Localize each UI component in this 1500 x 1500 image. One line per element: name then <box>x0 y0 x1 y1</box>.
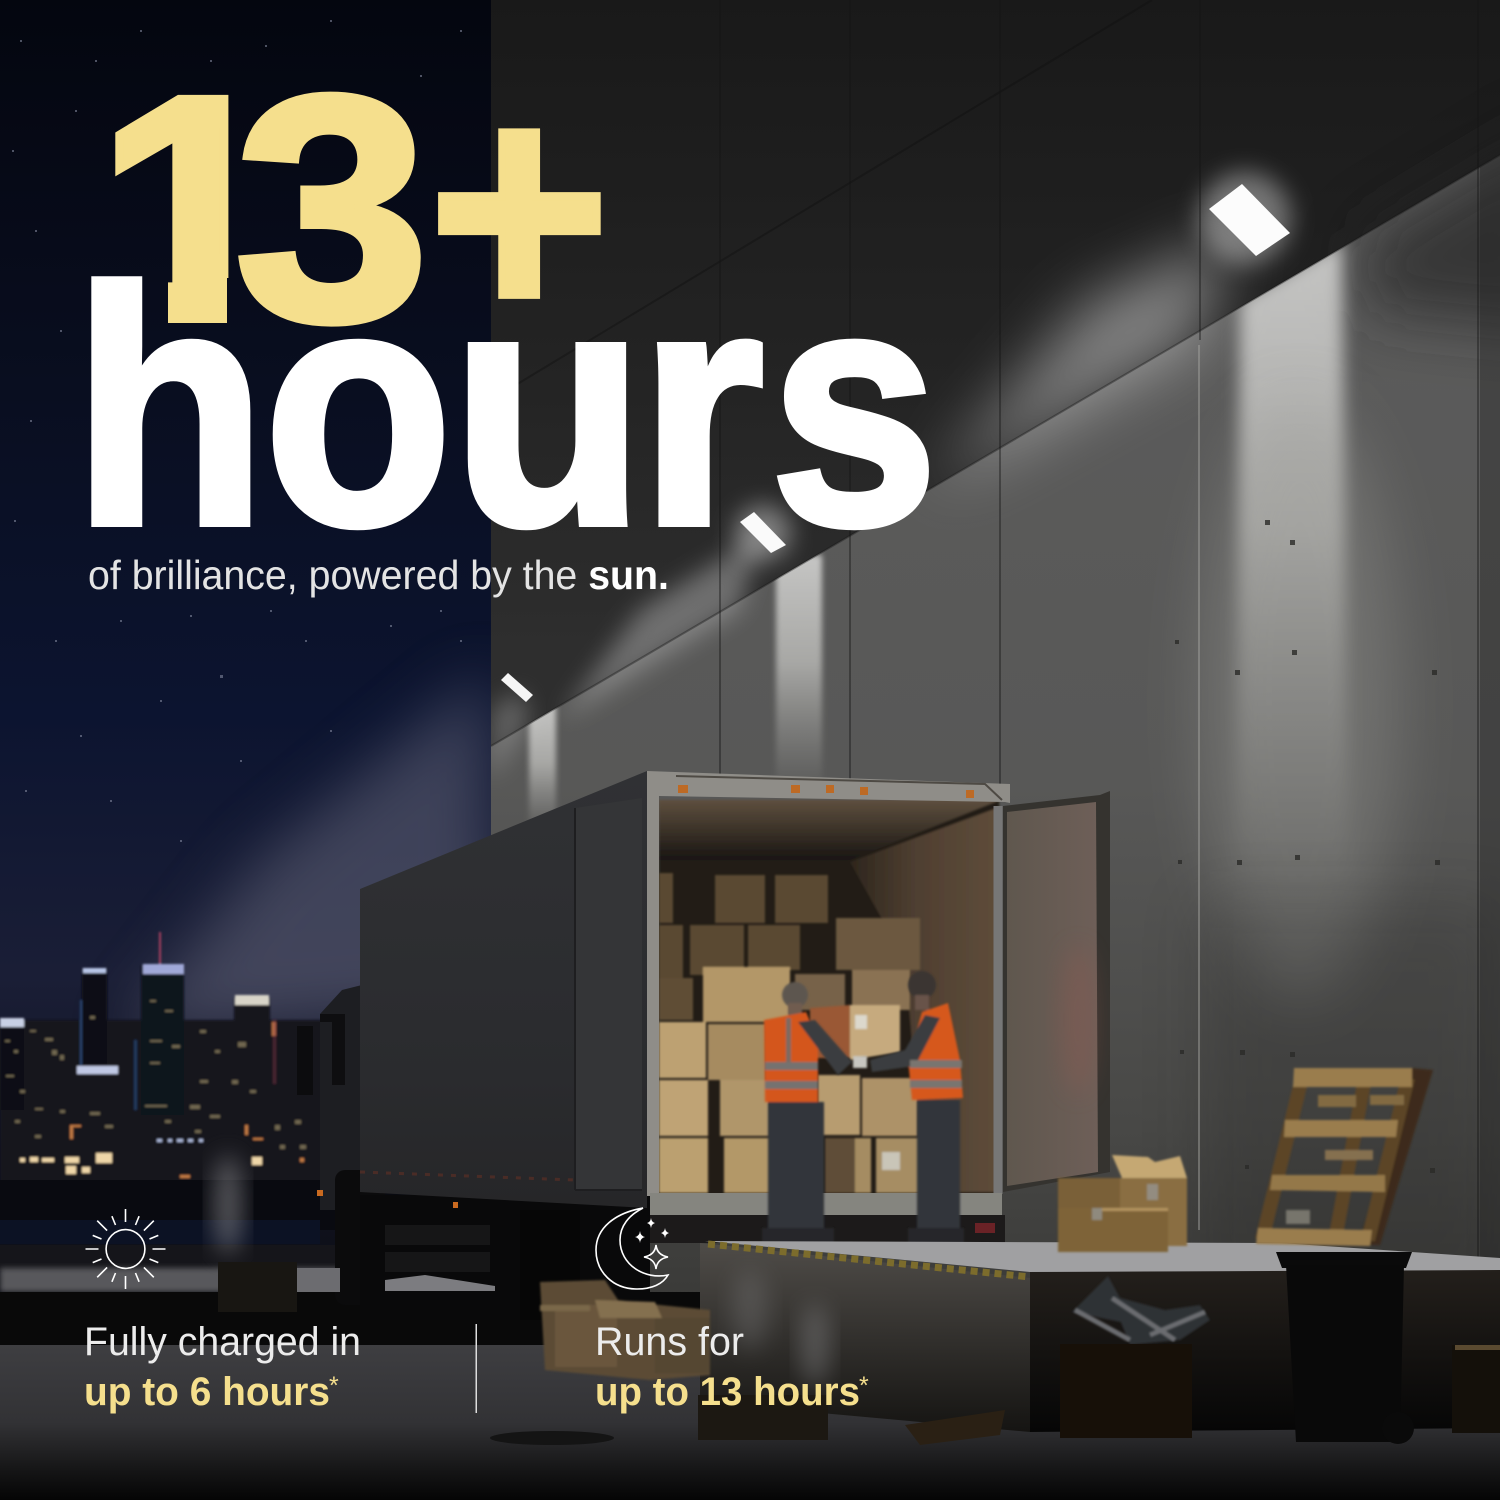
worker right <box>853 971 964 1244</box>
stat: run time: Runs for <box>595 1320 744 1364</box>
heading: 13+ <box>115 92 601 327</box>
lamp: middle wall light <box>740 512 786 553</box>
steam and small box left <box>214 1155 297 1312</box>
stat: charge time: Fully charged in <box>84 1320 361 1364</box>
foreground boxes and steam <box>490 1270 1005 1445</box>
stat: charge time: * <box>329 1372 339 1400</box>
worker left <box>762 982 852 1244</box>
heading: hours: r <box>640 221 764 595</box>
ground and water <box>0 1180 1500 1500</box>
icon: moon and stars <box>596 1208 669 1289</box>
truck interior <box>659 800 1000 1195</box>
open truck door <box>1003 791 1110 1192</box>
stat: run time: * <box>859 1372 869 1400</box>
cargo boxes <box>659 873 922 1193</box>
stat: charge time: up to 6 hours <box>84 1370 330 1414</box>
heading: hours: o <box>264 221 452 595</box>
truck box side <box>360 771 647 1208</box>
lamp: far wall light <box>501 673 533 702</box>
heading: hours: u <box>452 220 644 594</box>
divider <box>476 1324 477 1413</box>
heading: hours: s <box>771 221 938 595</box>
lamp: large wall light <box>1209 184 1290 256</box>
night sky with stars <box>0 0 500 1300</box>
wooden pallet <box>1256 1068 1433 1246</box>
scrap box at dock <box>1060 1276 1500 1438</box>
stat: run time: up to 13 hours <box>595 1370 860 1414</box>
truck frame and lights <box>647 771 1010 1243</box>
stat: run time <box>595 1320 869 1414</box>
subheading: of brilliance, powered by the sun. <box>88 552 669 598</box>
heading: hours: h <box>73 221 266 595</box>
icon: sun <box>86 1209 166 1289</box>
loading dock <box>700 1241 1500 1432</box>
open cardboard box on dock <box>1058 1155 1187 1252</box>
carried box <box>810 1005 900 1060</box>
concrete warehouse wall <box>491 0 1500 1300</box>
stat: charge time <box>84 1320 361 1414</box>
heading: 13+: 1 <box>96 30 288 387</box>
truck cab <box>297 985 650 1320</box>
cardboard boxes on ground <box>540 1280 710 1380</box>
city skyline <box>0 932 325 1185</box>
heading: 13+: + <box>429 30 609 388</box>
trash bin <box>1276 1252 1414 1444</box>
heading: hours <box>73 220 938 595</box>
heading: 13+: 3 <box>235 29 429 387</box>
